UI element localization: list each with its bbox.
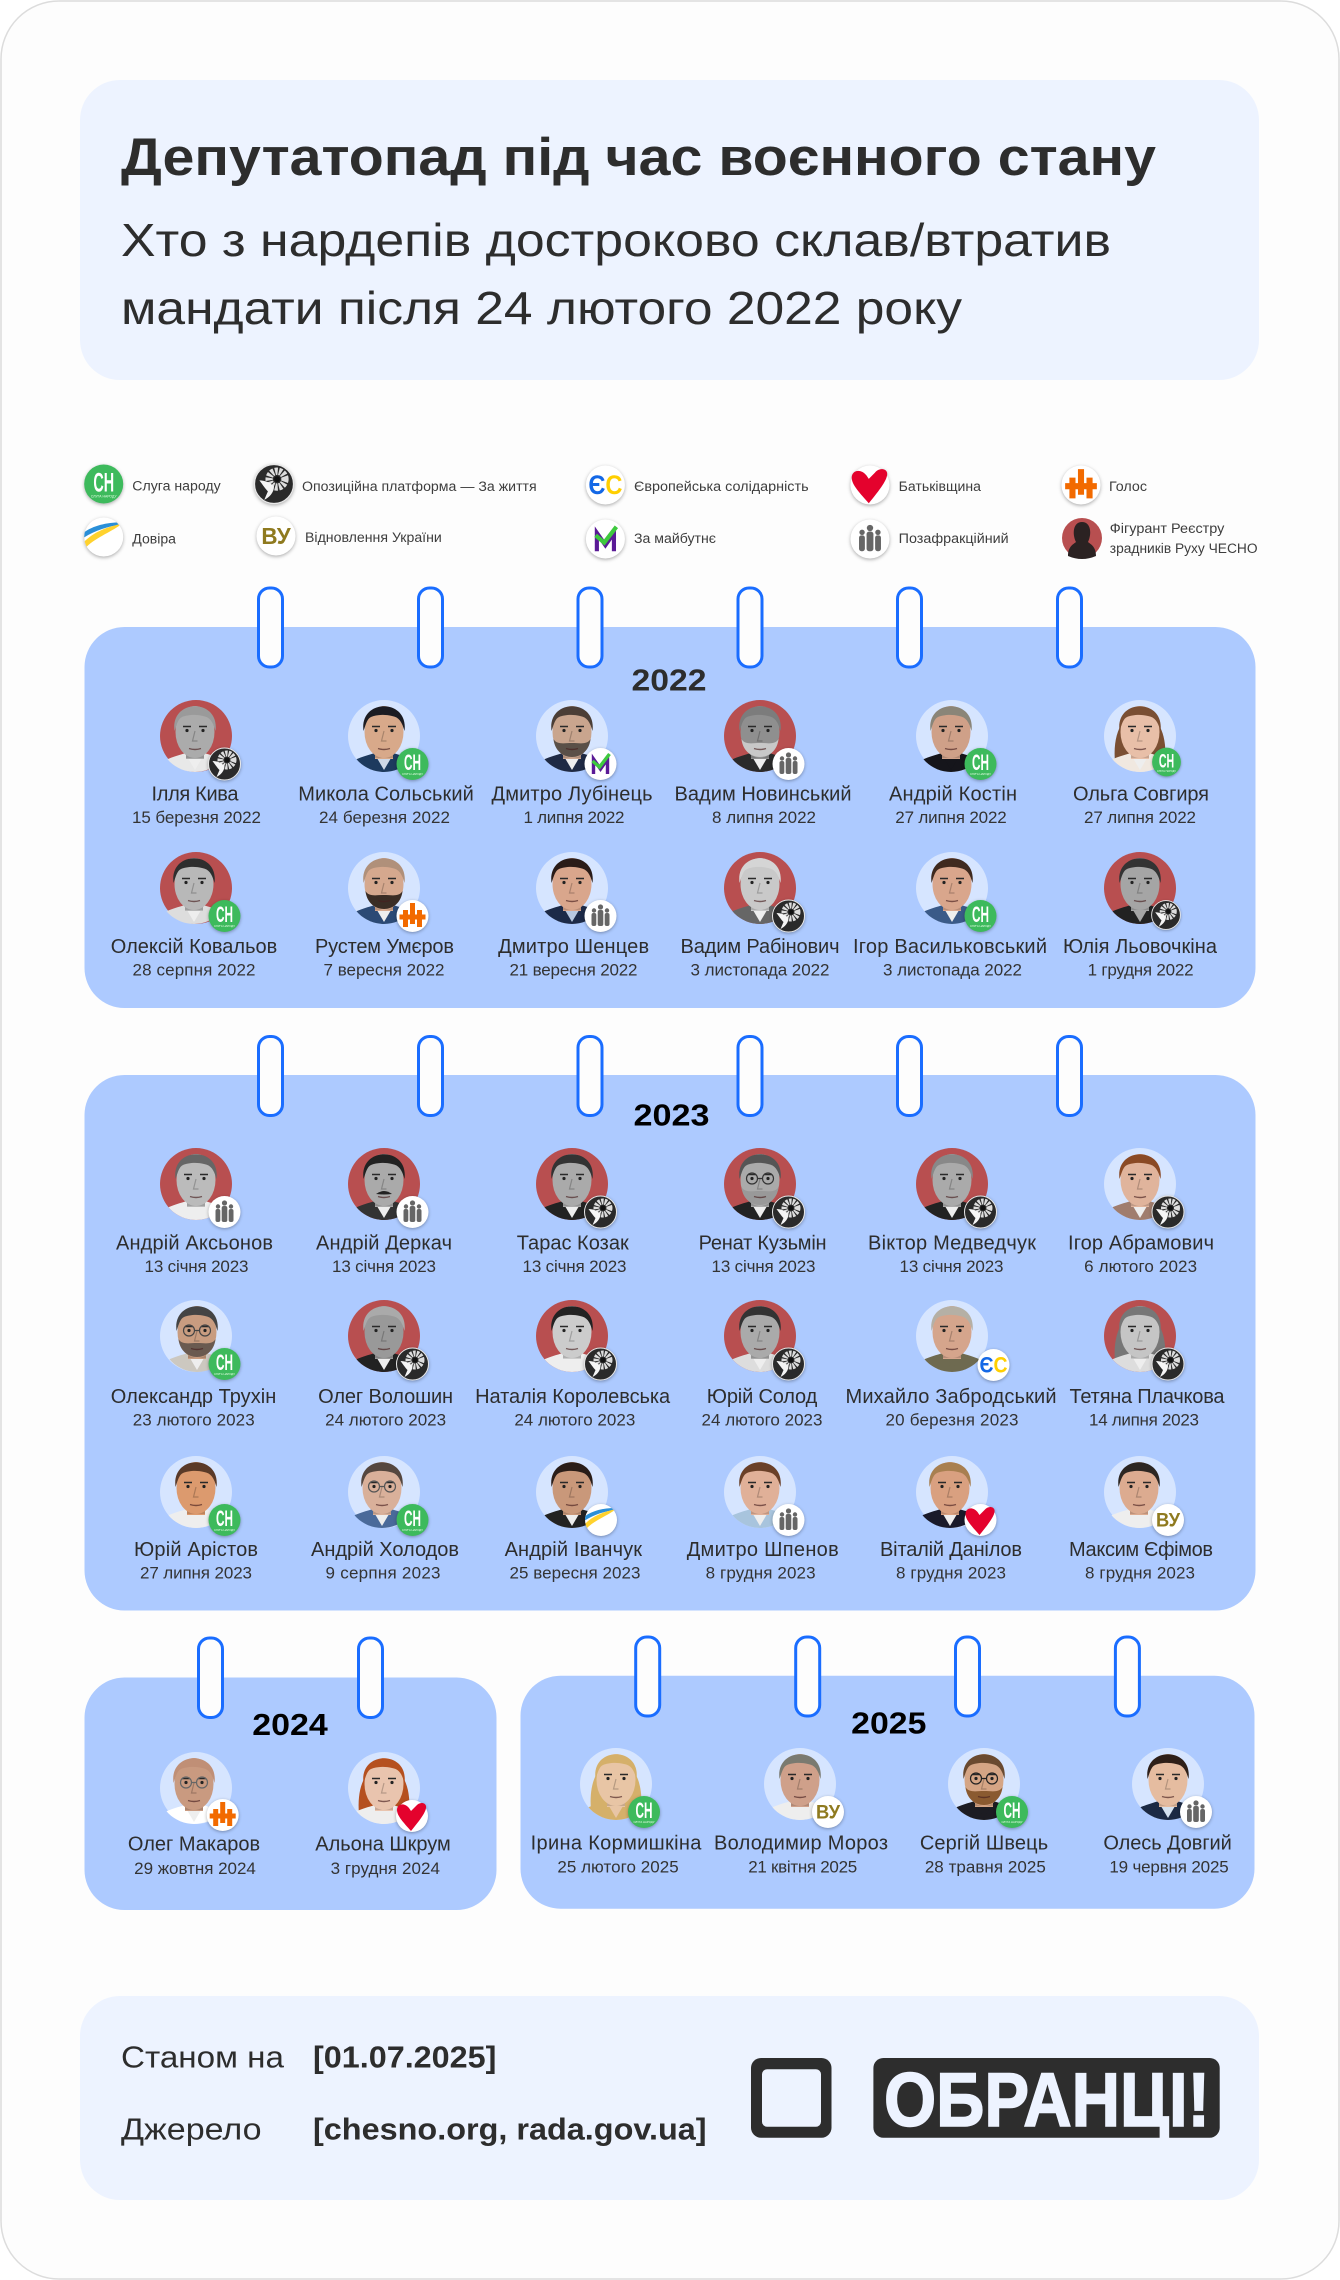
legend item: Голос: Голос: [1109, 479, 1147, 494]
person: Віталій Данілов: [880, 1456, 1022, 1582]
person: Ольга Совгиря: Ольга Совгиря: [1073, 784, 1209, 806]
person: Максим Єфімов: [1069, 1456, 1213, 1582]
person: Микола Сольський: [298, 700, 474, 827]
person: Андрій Костін: [889, 700, 1017, 827]
person: Дмитро Шпенов: [687, 1456, 839, 1582]
person: Ірина Кормишкіна: [531, 1748, 702, 1876]
legend item: Довіра: [83, 517, 177, 557]
person: Юрій Солод: [702, 1300, 822, 1429]
person: Володимир Мороз: Володимир Мороз: [714, 1832, 888, 1854]
panel: 2024: [84, 1638, 496, 1910]
person: Рустем Умєров: Рустем Умєров: [315, 936, 454, 958]
person: Тарас Козак: 13 січня 2023: [522, 1257, 626, 1276]
legend: [83, 464, 1258, 559]
person: Ірина Кормишкіна: Ірина Кормишкіна: [531, 1832, 702, 1854]
as-of date: [01.07.2025]: [313, 2039, 496, 2074]
person: Юрій Арістов: [134, 1456, 258, 1582]
panel: header: [80, 80, 1259, 380]
person: Андрій Деркач: Андрій Деркач: [316, 1233, 452, 1255]
person: Андрій Іванчук: Андрій Іванчук: [505, 1539, 642, 1561]
person: Олексій Ковальов: [111, 852, 277, 980]
person: Андрій Аксьонов: [116, 1148, 273, 1276]
person: Андрій Деркач: 13 січня 2023: [332, 1257, 436, 1276]
person: Вадим Новинський: Вадим Новинський: [674, 784, 852, 806]
person: Альона Шкрум: Альона Шкрум: [315, 1834, 451, 1856]
person: Ігор Васильковський: Ігор Васильковський: [853, 936, 1047, 958]
legend item: Позафракційний: [850, 519, 1009, 559]
subtitle: мандати після 24 лютого 2022 року: [121, 282, 962, 334]
person: Віктор Медведчук: Віктор Медведчук: [868, 1233, 1036, 1255]
person: Вадим Рабінович: [680, 852, 840, 980]
as-of date: [121, 2039, 496, 2074]
person: Володимир Мороз: 21 квітня 2025: [748, 1857, 857, 1876]
binder rings: [636, 1637, 1139, 1716]
person: Дмитро Шенцев: Дмитро Шенцев: [498, 936, 649, 958]
person: Ігор Абрамович: 6 лютого 2023: [1084, 1257, 1197, 1276]
person: Віктор Медведчук: [868, 1148, 1036, 1276]
legend item: Слуга народу: Слуга народу: [132, 479, 221, 494]
person: Максим Єфімов: 8 грудня 2023: [1085, 1563, 1195, 1582]
person: Юрій Солод: 24 лютого 2023: [702, 1410, 822, 1429]
person: Юлія Льовочкіна: 1 грудня 2022: [1088, 961, 1194, 980]
person: Андрій Аксьонов: 13 січня 2023: [144, 1257, 248, 1276]
legend item: Слуга народу: [84, 464, 221, 504]
binder rings: [258, 588, 1082, 667]
source: Джерело: [121, 2111, 262, 2146]
person: Олег Макаров: [128, 1752, 260, 1878]
person: Олег Волошин: 24 лютого 2023: [325, 1410, 446, 1429]
person: Олександр Трухін: 23 лютого 2023: [133, 1410, 255, 1429]
person: Юлія Льовочкіна: Юлія Льовочкіна: [1063, 936, 1218, 958]
person: Ігор Абрамович: Ігор Абрамович: [1068, 1233, 1214, 1255]
panel: 2023: [84, 1036, 1256, 1610]
person: Андрій Холодов: 9 серпня 2023: [326, 1563, 440, 1582]
person: Олесь Довгий: [1103, 1748, 1232, 1876]
legend item: Позафракційний: Позафракційний: [899, 531, 1009, 546]
person: Юрій Солод: Юрій Солод: [707, 1386, 818, 1408]
source: [121, 2111, 707, 2146]
legend item: Європейська солідарність: [586, 465, 809, 505]
person: Тарас Козак: Тарас Козак: [517, 1233, 629, 1255]
person: Дмитро Лубінець: 1 липня 2022: [524, 808, 624, 827]
legend item: За майбутнє: За майбутнє: [634, 531, 716, 546]
person: Юрій Арістов: 27 липня 2023: [140, 1563, 252, 1582]
person: Рустем Умєров: [315, 852, 454, 980]
person: Наталія Королевська: 24 лютого 2023: [514, 1410, 635, 1429]
legend item: Фігурант Реєстру: [1062, 518, 1258, 559]
panel: 2025: [520, 1637, 1254, 1909]
person: Микола Сольський: 24 березня 2022: [319, 808, 450, 827]
person: Олексій Ковальов: Олексій Ковальов: [111, 936, 277, 958]
person: Олександр Трухін: [111, 1300, 276, 1429]
year heading: 2025: [851, 1705, 926, 1740]
person: Олександр Трухін: Олександр Трухін: [111, 1386, 276, 1408]
person: Ольга Совгиря: [1073, 700, 1209, 827]
person: Андрій Костін: Андрій Костін: [889, 784, 1017, 806]
person: Вадим Рабінович: 3 листопада 2022: [690, 961, 830, 980]
person: Вадим Новинський: [674, 700, 852, 827]
legend item: Європейська солідарність: Європейська солідарність: [634, 479, 809, 494]
year heading: 2024: [252, 1707, 329, 1742]
person: Наталія Королевська: Наталія Королевська: [475, 1386, 671, 1408]
person: Дмитро Лубінець: Дмитро Лубінець: [492, 784, 652, 806]
person: Ігор Васильковський: 3 листопада 2022: [883, 961, 1022, 980]
person: Сергій Швець: [920, 1748, 1048, 1876]
person: Рустем Умєров: 7 вересня 2022: [324, 961, 444, 980]
person: Дмитро Лубінець: [492, 700, 652, 827]
person: Олег Макаров: Олег Макаров: [128, 1834, 260, 1856]
person: Ігор Абрамович: [1068, 1148, 1214, 1276]
person: Андрій Деркач: [316, 1148, 452, 1276]
legend item: Відновлення України: [256, 516, 442, 556]
person: Дмитро Шенцев: 21 вересня 2022: [510, 961, 638, 980]
person: Олексій Ковальов: 28 серпня 2022: [132, 961, 256, 980]
person: Тетяна Плачкова: 14 липня 2023: [1089, 1410, 1199, 1429]
person: Олег Волошин: Олег Волошин: [318, 1386, 453, 1408]
person: Михайло Забродський: 20 березня 2023: [886, 1410, 1018, 1429]
person: Олег Волошин: [318, 1300, 453, 1429]
legend item: Батьківщина: [850, 465, 982, 505]
logo: square mark: [751, 2058, 832, 2138]
person: Андрій Холодов: Андрій Холодов: [311, 1539, 459, 1561]
legend item: Відновлення України: Відновлення України: [305, 530, 442, 545]
person: Андрій Іванчук: 25 вересня 2023: [510, 1563, 640, 1582]
legend item: Опозиційна платформа: Опозиційна платформа — За життя: [302, 479, 537, 494]
legend item: Голос: [1061, 465, 1147, 505]
person: Сергій Швець: Сергій Швець: [920, 1832, 1048, 1854]
person: Ілля Кива: 15 березня 2022: [132, 808, 261, 827]
subtitle: Хто з нардепів достроково склав/втратив: [121, 214, 1111, 266]
person: Сергій Швець: 28 травня 2025: [925, 1857, 1046, 1876]
person: Олесь Довгий: 19 червня 2025: [1109, 1857, 1229, 1876]
legend item: Фігурант Реєстру: зрадників Руху ЧЕСНО: [1110, 541, 1258, 556]
person: Альона Шкрум: 3 грудня 2024: [331, 1859, 440, 1878]
person: Андрій Костін: 27 липня 2022: [895, 808, 1007, 827]
as-of date: Станом на: [121, 2039, 285, 2074]
person: Ренат Кузьмін: [699, 1148, 827, 1276]
title: Депутатопад під час воєнного стану: [121, 128, 1157, 187]
person: Ілля Кива: [132, 700, 261, 827]
person: Альона Шкрум: [315, 1752, 451, 1878]
year heading: 2023: [634, 1098, 710, 1133]
person: Віктор Медведчук: 13 січня 2023: [900, 1257, 1004, 1276]
legend item: Опозиційна платформа: [254, 464, 537, 504]
person: Юлія Льовочкіна: [1063, 852, 1218, 980]
person: Олесь Довгий: Олесь Довгий: [1103, 1832, 1232, 1854]
legend item: Батьківщина: Батьківщина: [899, 479, 982, 494]
legend item: Довіра: Довіра: [132, 531, 177, 546]
legend item: Фігурант Реєстру: Фігурант Реєстру: [1110, 521, 1225, 536]
person: Ренат Кузьмін: 13 січня 2023: [712, 1257, 816, 1276]
person: Юрій Арістов: Юрій Арістов: [134, 1539, 258, 1561]
panel: footer: [80, 1996, 1259, 2200]
person: Тетяна Плачкова: Тетяна Плачкова: [1070, 1386, 1225, 1408]
person: Тетяна Плачкова: [1070, 1300, 1225, 1429]
source: [chesno.org, rada.gov.ua]: [313, 2111, 707, 2146]
person: Віталій Данілов: Віталій Данілов: [880, 1539, 1022, 1561]
person: Ігор Васильковський: [853, 852, 1047, 980]
person: Володимир Мороз: [714, 1748, 888, 1876]
subtitle: [121, 214, 1111, 334]
person: Тарас Козак: [517, 1148, 629, 1276]
year heading: 2022: [632, 663, 706, 698]
person: Олег Макаров: 29 жовтня 2024: [134, 1859, 256, 1878]
person: Андрій Іванчук: [505, 1456, 642, 1582]
person: Михайло Забродський: Михайло Забродський: [846, 1386, 1056, 1408]
person: Ольга Совгиря: 27 липня 2022: [1084, 808, 1196, 827]
person: Михайло Забродський: [846, 1300, 1056, 1429]
person: Максим Єфімов: Максим Єфімов: [1069, 1539, 1213, 1561]
binder rings: [258, 1036, 1082, 1116]
person: Ілля Кива: Ілля Кива: [152, 784, 239, 806]
person: Дмитро Шенцев: [498, 852, 649, 980]
person: Вадим Новинський: 8 липня 2022: [712, 808, 816, 827]
person: Дмитро Шпенов: 8 грудня 2023: [706, 1563, 816, 1582]
person: Андрій Холодов: [311, 1456, 459, 1582]
legend item: За майбутнє: [586, 519, 716, 559]
person: Ірина Кормишкіна: 25 лютого 2025: [557, 1857, 679, 1876]
logo: Обранці wordmark: ОБРАНЦІ!: [884, 2058, 1210, 2143]
person: Вадим Рабінович: Вадим Рабінович: [680, 936, 840, 958]
person: Андрій Аксьонов: Андрій Аксьонов: [116, 1233, 273, 1255]
binder rings: [198, 1638, 382, 1718]
person: Наталія Королевська: [475, 1300, 671, 1429]
person: Микола Сольський: Микола Сольський: [298, 784, 474, 806]
person: Ренат Кузьмін: Ренат Кузьмін: [699, 1233, 827, 1255]
panel: 2022: [84, 588, 1256, 1008]
person: Віталій Данілов: 8 грудня 2023: [896, 1563, 1006, 1582]
person: Дмитро Шпенов: Дмитро Шпенов: [687, 1539, 839, 1561]
